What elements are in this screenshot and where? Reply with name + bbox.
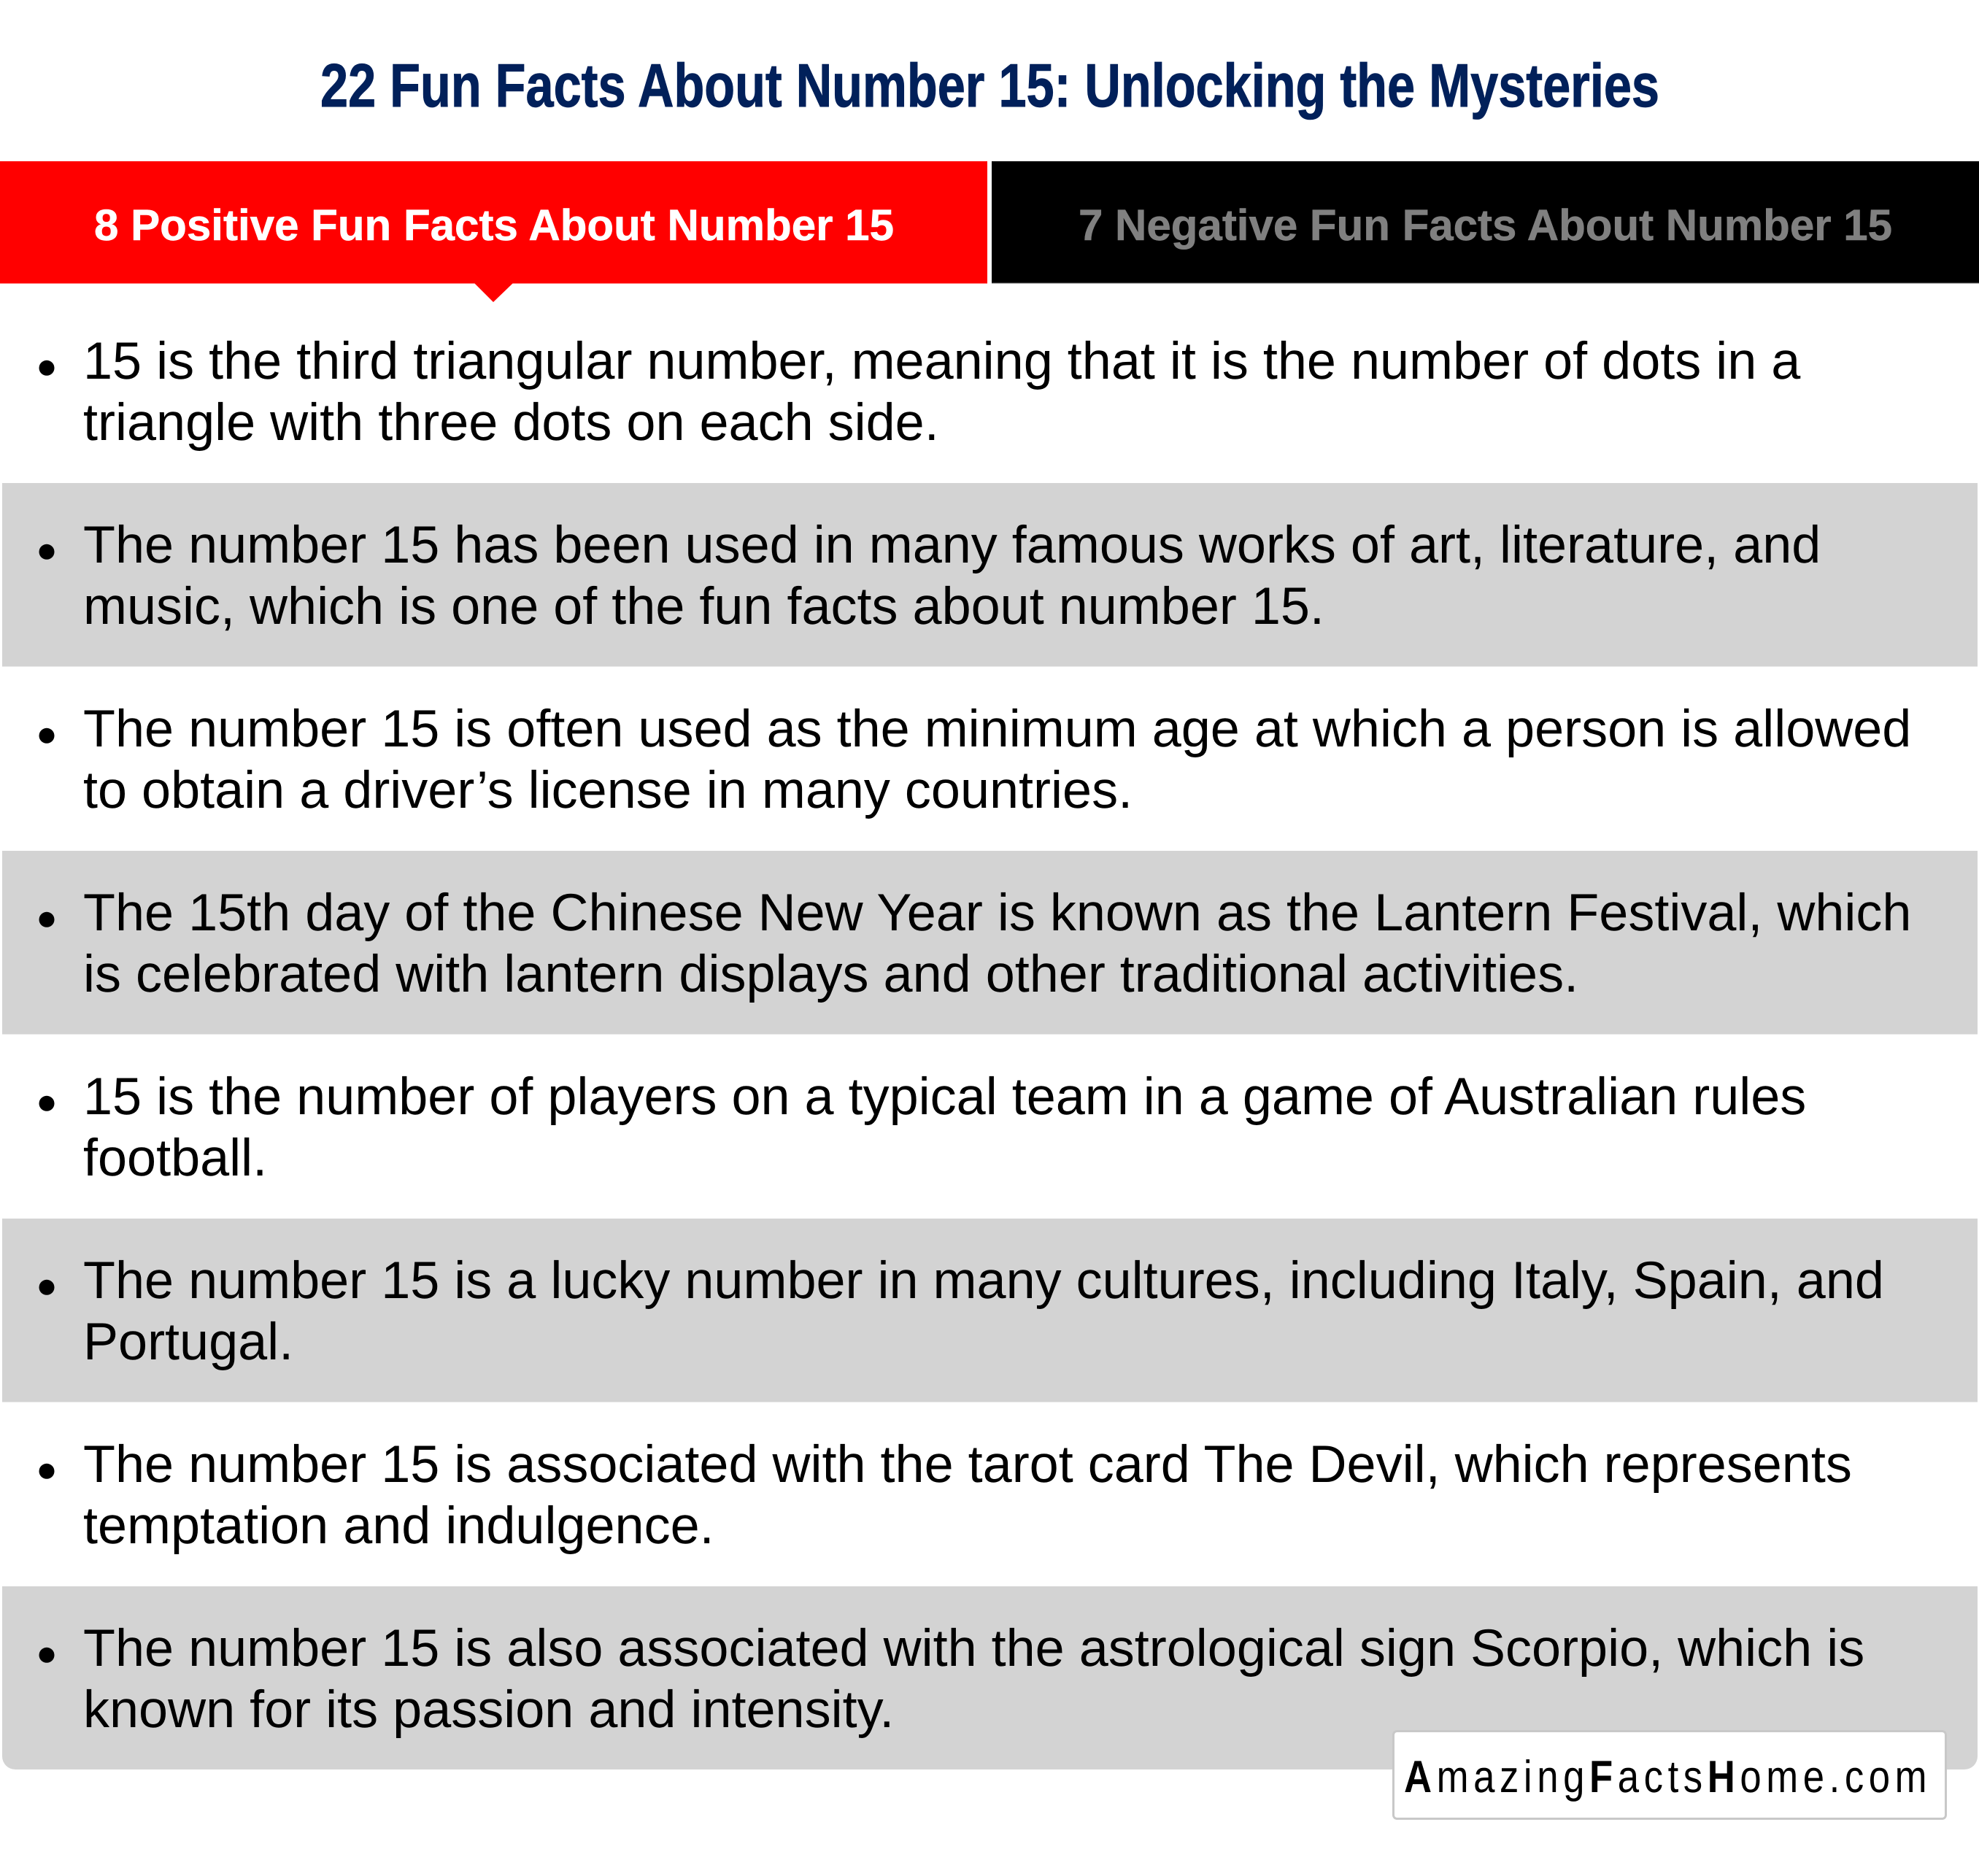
tab: negative facts: [992, 161, 1979, 283]
fact 1 text: 15 is the third triangular number, meaning that it is the number of dots in a: [83, 332, 1801, 390]
tab label: positive: 8 Positive Fun Facts About Number 15: [94, 201, 894, 250]
tab label: negative: 7 Negative Fun Facts About Number 15: [1079, 201, 1892, 250]
fact 5: [39, 1068, 1806, 1187]
fact 1 text: triangle with three dots on each side.: [83, 393, 939, 452]
fact 1: [39, 332, 1801, 452]
fact 7: [39, 1435, 1852, 1555]
fact 6 text: The number 15 is a lucky number in many cultures, including Italy, Spain, and: [83, 1251, 1884, 1310]
fact 8: [2, 1586, 1978, 1769]
fact 5 text: 15 is the number of players on a typical team in a game of Australian rules: [83, 1068, 1806, 1126]
watermark text: AmazingFactsHome.com: [1404, 1752, 1927, 1802]
fact 6 text: Portugal.: [83, 1313, 293, 1371]
tab: positive facts: [0, 161, 987, 302]
fact 6: [2, 1219, 1978, 1402]
fact 4 text: The 15th day of the Chinese New Year is known as the Lantern Festival, which: [83, 884, 1911, 942]
fact 4 text: is celebrated with lantern displays and other traditional activities.: [83, 945, 1578, 1003]
title: 22 Fun Facts About Number 15: Unlocking the Mysteries: [320, 51, 1659, 120]
fact 4: [2, 851, 1978, 1035]
fact 2: [2, 483, 1978, 667]
fact 8 text: known for its passion and intensity.: [83, 1680, 894, 1739]
fact 8 text: The number 15 is also associated with the astrological sign Scorpio, which is: [83, 1619, 1864, 1678]
fact 7 text: temptation and indulgence.: [83, 1497, 714, 1555]
fact 7 text: The number 15 is associated with the tarot card The Devil, which represents: [83, 1435, 1852, 1494]
fact 2 text: The number 15 has been used in many famous works of art, literature, and: [83, 516, 1821, 574]
fact 3 text: to obtain a driver’s license in many countries.: [83, 761, 1133, 819]
watermark badge: [1394, 1731, 1945, 1818]
fact 5 text: football.: [83, 1129, 267, 1187]
fact 2 text: music, which is one of the fun facts about number 15.: [83, 577, 1324, 636]
fact 3 text: The number 15 is often used as the minimum age at which a person is allowed: [83, 700, 1911, 758]
fact 3: [39, 700, 1911, 819]
